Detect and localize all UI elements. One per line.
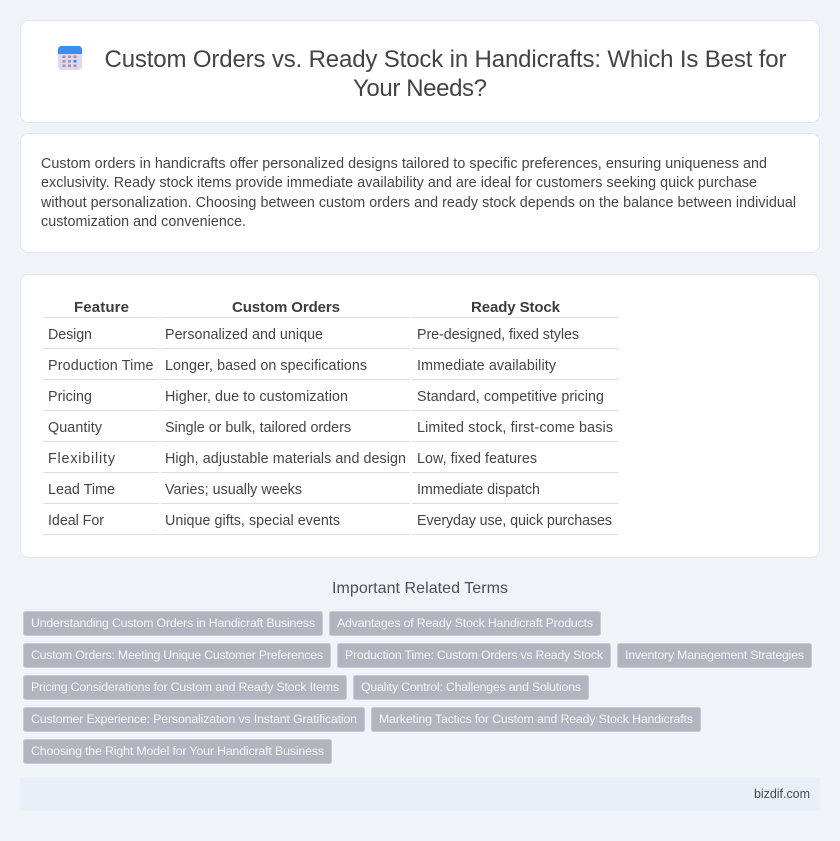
row: pricing: Higher, due to customization (165, 389, 348, 405)
panel: related term tags: Customer Experience: Personalization vs Instant Gratification (31, 712, 357, 726)
title (104, 46, 786, 102)
panel: related term tags (24, 612, 812, 764)
panel: introduction text: exclusivity. Ready stock items provide immediate availability and are ideal for customers seeking quick purchase (41, 175, 757, 191)
row: lead time: Varies; usually weeks (165, 482, 302, 498)
row: quantity: Quantity (48, 420, 103, 436)
row: flexibility: Low, fixed features (417, 451, 537, 467)
row: ideal for: Unique gifts, special events (165, 513, 340, 529)
row: lead time (48, 482, 540, 498)
row: pricing: Pricing (48, 389, 92, 405)
row: quantity: Single or bulk, tailored orders (165, 420, 351, 436)
panel: introduction text: customization and convenience. (41, 214, 246, 230)
row: lead time: Lead Time (48, 482, 115, 498)
panel: introduction text: without personalization. Choosing between custom orders and ready stock depends on the balance between individual (40, 195, 796, 211)
row: design: Design (48, 327, 92, 343)
row: flexibility: High, adjustable materials and design (165, 451, 406, 467)
panel: related term tags: Quality Control: Challenges and Solutions (361, 680, 581, 694)
row: ideal for: Ideal For (48, 513, 104, 529)
panel: related term tags: Choosing the Right Model for Your Handicraft Business (31, 744, 324, 758)
row: flexibility (48, 451, 537, 467)
panel: title card (20, 20, 820, 122)
row: production time: Production Time (48, 358, 154, 374)
panel: comparison table (20, 274, 820, 558)
row: quantity: Limited stock, first-come basis (417, 420, 613, 436)
panel: related term tags: Production Time: Custom Orders vs Ready Stock (345, 648, 604, 662)
title: Custom Orders vs. Ready Stock in Handicrafts: Which Is Best for (104, 46, 786, 73)
row: design: Pre-designed, fixed styles (417, 327, 579, 343)
panel: introduction text: Custom orders in handicrafts offer personalized designs tailored to specific preferences, ensuring uniqueness and (41, 156, 767, 172)
panel: related term tags: Marketing Tactics for Custom and Ready Stock Handicrafts (379, 712, 693, 726)
panel: related term tags: Understanding Custom Orders in Handicraft Business (31, 616, 315, 630)
title: Your Needs? (353, 75, 487, 102)
row: ideal for (48, 513, 612, 529)
row: flexibility: Flexibility (48, 451, 116, 467)
panel: introduction text (20, 134, 820, 252)
table header: Custom Orders (232, 299, 340, 316)
footer: bizdif.com (754, 787, 810, 801)
row: quantity (48, 420, 613, 436)
row: pricing: Standard, competitive pricing (417, 389, 604, 405)
panel: related term tags: Advantages of Ready Stock Handicraft Products (337, 616, 593, 630)
panel: related term tags: Inventory Management Strategies (625, 648, 804, 662)
table header: Feature (74, 299, 129, 316)
footer (20, 777, 820, 811)
row: pricing (48, 389, 604, 405)
row: lead time: Immediate dispatch (417, 482, 540, 498)
heading: related terms: Important Related Terms (332, 580, 508, 597)
row: production time (48, 358, 557, 374)
table header (74, 299, 561, 316)
row: design (48, 327, 579, 343)
row: ideal for: Everyday use, quick purchases (417, 513, 612, 529)
row: production time: Longer, based on specifications (165, 358, 367, 374)
panel: related term tags: Pricing Considerations for Custom and Ready Stock Items (31, 680, 339, 694)
row: design: Personalized and unique (165, 327, 323, 343)
panel: related term tags: Custom Orders: Meeting Unique Customer Preferences (31, 648, 323, 662)
icon: calendar (58, 46, 82, 70)
row: production time: Immediate availability (417, 358, 557, 374)
table header: Ready Stock (471, 299, 561, 316)
